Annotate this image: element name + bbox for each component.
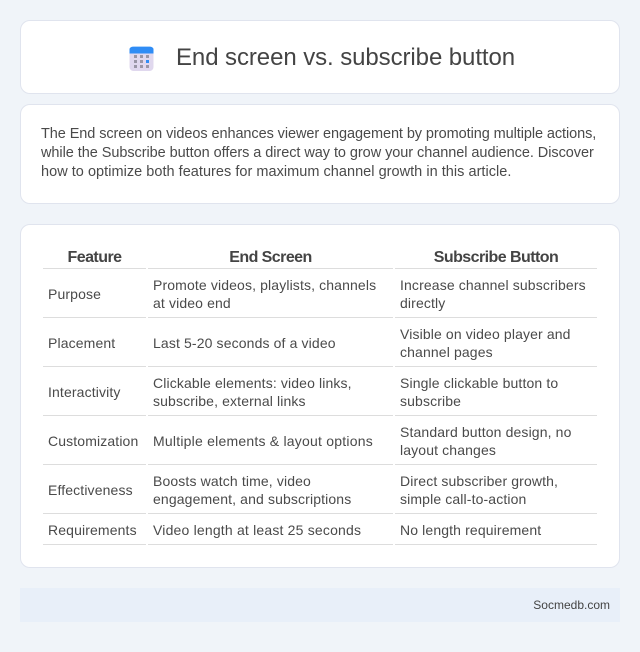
footer text: Socmedb.com	[533, 598, 610, 612]
row: customization	[48, 424, 572, 458]
row: interactivity: Interactivity	[48, 384, 120, 400]
row: purpose: Promote videos, playlists, channels	[153, 277, 376, 293]
table header: End Screen	[229, 249, 312, 266]
intro paragraph: while the Subscribe button offers a direct way to grow your channel audience. Discover	[41, 145, 594, 161]
row: purpose: Purpose	[48, 286, 101, 302]
row: requirements: Requirements	[48, 522, 137, 538]
row: purpose: at video end	[153, 295, 231, 311]
row: effectiveness: Boosts watch time, video	[153, 473, 311, 489]
row: requirements: No length requirement	[400, 522, 541, 538]
row: placement: Last 5-20 seconds of a video	[153, 335, 336, 351]
table header: Subscribe Button	[434, 249, 558, 266]
table header: Feature	[68, 249, 121, 266]
row: interactivity	[48, 375, 558, 409]
row: effectiveness: Direct subscriber growth,	[400, 473, 558, 489]
title: End screen vs. subscribe button	[176, 44, 515, 71]
row: customization: Multiple elements & layout options	[153, 433, 373, 449]
row: customization: Standard button design, no	[400, 424, 572, 440]
row: effectiveness: simple call-to-action	[400, 491, 526, 507]
row: requirements: Video length at least 25 seconds	[153, 522, 361, 538]
row: placement: channel pages	[400, 344, 493, 360]
row: placement: Placement	[48, 335, 115, 351]
intro paragraph	[41, 126, 596, 180]
row: interactivity: subscribe, external links	[153, 393, 306, 409]
row: customization: layout changes	[400, 442, 496, 458]
row: purpose	[48, 277, 586, 311]
row: purpose: Increase channel subscribers	[400, 277, 586, 293]
row: interactivity: Single clickable button to	[400, 375, 558, 391]
row: interactivity: Clickable elements: video links,	[153, 375, 352, 391]
panel: intro text	[20, 104, 620, 204]
row: effectiveness: Effectiveness	[48, 482, 133, 498]
row: effectiveness	[48, 473, 558, 507]
footer bar	[20, 588, 620, 622]
row: purpose: directly	[400, 295, 445, 311]
row: placement: Visible on video player and	[400, 326, 571, 342]
row: requirements	[48, 522, 542, 538]
row: interactivity: subscribe	[400, 393, 461, 409]
panel: title card	[20, 20, 620, 94]
row: customization: Customization	[48, 433, 138, 449]
intro paragraph: how to optimize both features for maximum channel growth in this article.	[41, 164, 511, 180]
row: placement	[48, 326, 571, 360]
intro paragraph: The End screen on videos enhances viewer engagement by promoting multiple actions,	[41, 126, 596, 142]
panel: comparison table	[20, 224, 620, 568]
icon: calendar	[130, 46, 154, 71]
table header	[68, 249, 558, 266]
row: effectiveness: engagement, and subscriptions	[153, 491, 351, 507]
